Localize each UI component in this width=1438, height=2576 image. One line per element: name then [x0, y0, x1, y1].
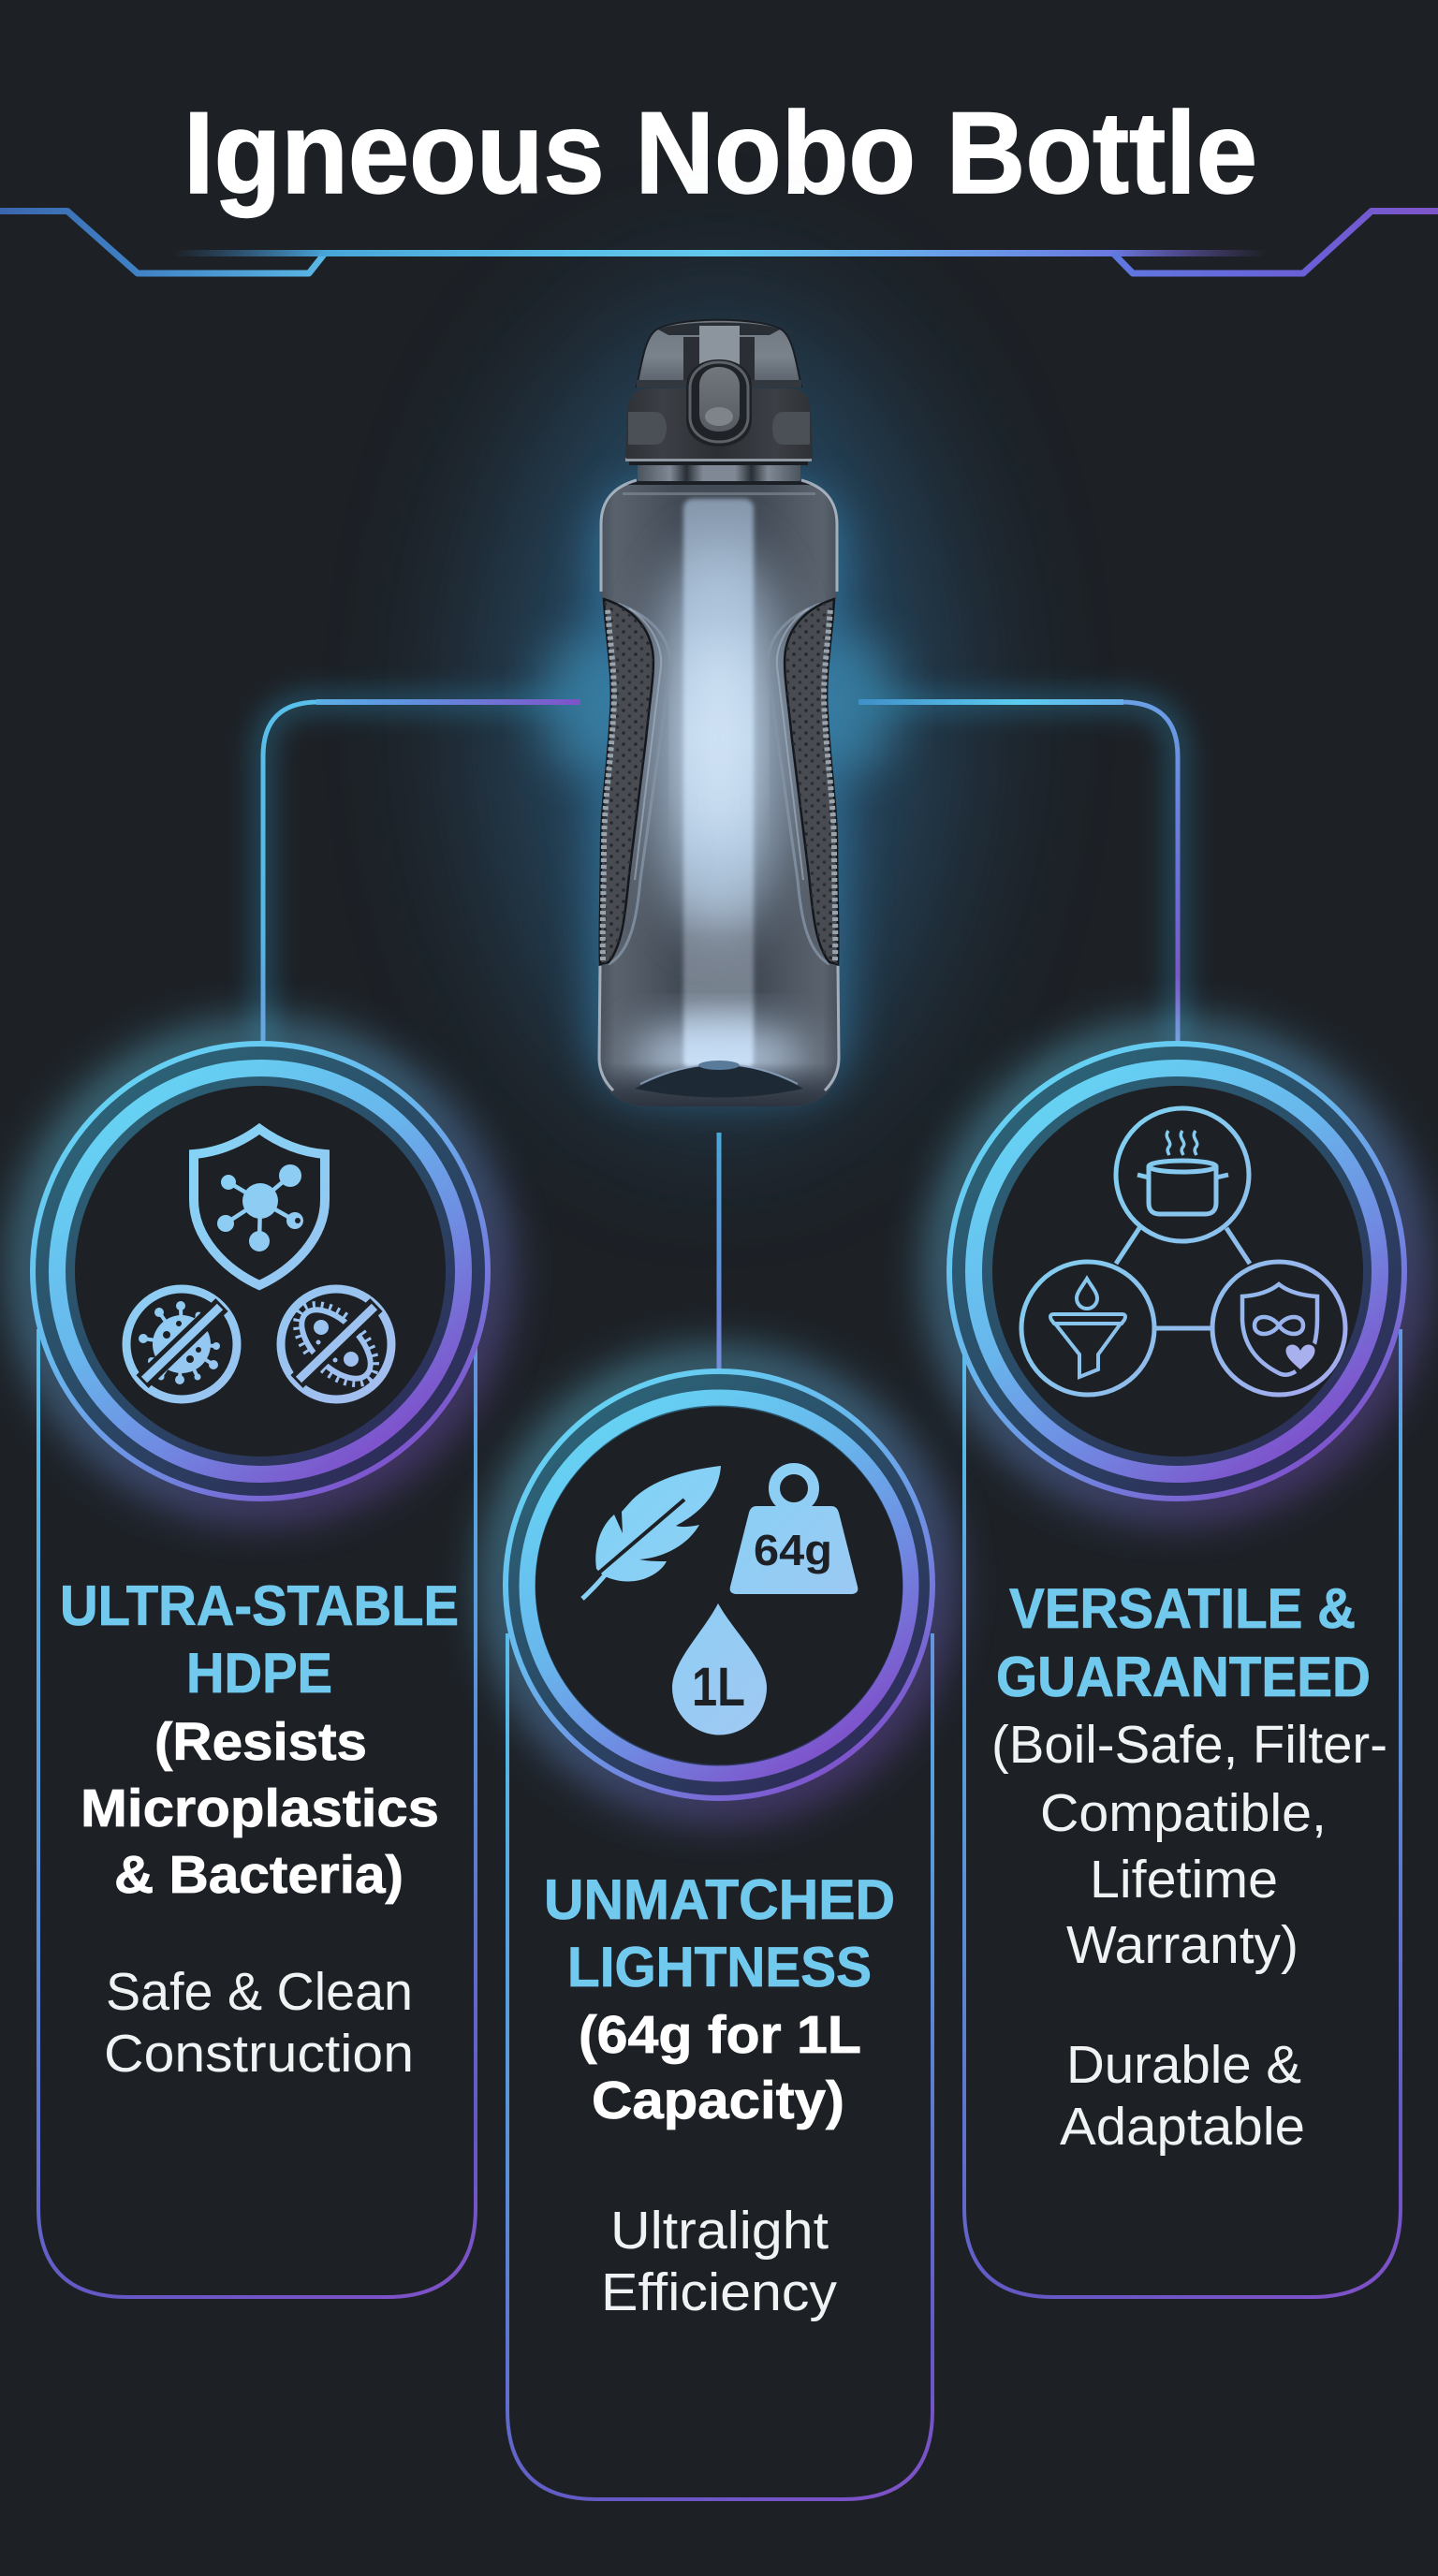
icon: boiling pot	[1116, 1108, 1249, 1241]
bottle body	[595, 473, 843, 1114]
bottle outline rim light	[599, 480, 839, 1090]
caption: ultralight efficiency	[601, 2201, 838, 2322]
icon: filter funnel and drop	[1021, 1262, 1154, 1395]
caption: safe and clean construction: Safe & Clean	[106, 1962, 413, 2022]
icon: no bacteria	[281, 1289, 391, 1399]
bottle neck	[625, 457, 812, 481]
heading: ultra-stable HDPE: ULTRA-STABLE	[60, 1574, 459, 1637]
heading: unmatched lightness: UNMATCHED	[544, 1868, 895, 1931]
icon: lifetime warranty shield	[1212, 1262, 1345, 1395]
right feature circle	[947, 1042, 1406, 1500]
bottle glow	[485, 309, 953, 1114]
heading: versatile and guaranteed	[996, 1577, 1371, 1708]
subheading: 64g for 1L capacity: Capacity)	[592, 2071, 844, 2130]
caption: safe and clean construction: Construction	[104, 2024, 414, 2084]
subheading: 64g for 1L capacity	[579, 2005, 861, 2130]
subheading: resists microplastics and bacteria: & Bacteria)	[114, 1845, 404, 1905]
icon: feather	[582, 1466, 721, 1599]
caption: durable and adaptable	[1060, 2035, 1305, 2157]
icon: 64g weight: 64g	[754, 1526, 832, 1574]
subheading: resists microplastics and bacteria: Microplastics	[81, 1778, 439, 1838]
subheading: resists microplastics and bacteria: (Resists	[154, 1712, 367, 1772]
subheading: resists microplastics and bacteria	[81, 1712, 439, 1905]
icon: network of three roundels	[1021, 1108, 1345, 1395]
subheading: boil-safe, filter-compatible, lifetime warranty: Lifetime	[1090, 1850, 1278, 1910]
text block: left card	[60, 1574, 459, 2084]
text block: centre card	[544, 1868, 895, 2322]
caption: durable and adaptable: Adaptable	[1060, 2097, 1305, 2157]
connector: bottle to left circle	[263, 702, 580, 1044]
panel: right card outline	[964, 1329, 1401, 2297]
caption: ultralight efficiency: Ultralight	[610, 2201, 829, 2261]
subheading: 64g for 1L capacity: (64g for 1L	[579, 2005, 861, 2065]
subheading: boil-safe, filter-compatible, lifetime warranty: Warranty)	[1066, 1915, 1299, 1975]
panel: centre card outline	[507, 1633, 932, 2499]
icon: no virus	[126, 1289, 237, 1399]
caption: durable and adaptable: Durable &	[1066, 2035, 1301, 2095]
connector: bottle to right circle	[858, 702, 1178, 1044]
centre feature circle	[504, 1369, 934, 1800]
bottle grips	[600, 599, 838, 964]
heading: unmatched lightness: LIGHTNESS	[567, 1936, 872, 1998]
heading: ultra-stable HDPE: HDPE	[186, 1642, 332, 1705]
left feature circle	[31, 1042, 490, 1500]
caption: ultralight efficiency: Efficiency	[601, 2262, 838, 2322]
icon: shield with molecule	[194, 1129, 325, 1285]
subheading: boil-safe, filter-compatible, lifetime warranty	[991, 1715, 1387, 1975]
heading: ultra-stable HDPE	[60, 1574, 459, 1705]
text block: right card	[991, 1577, 1387, 2157]
icon: 1L drop: 1L	[692, 1657, 745, 1718]
subheading: boil-safe, filter-compatible, lifetime warranty: (Boil-Safe, Filter-	[991, 1715, 1387, 1775]
icon: 64g weight	[730, 1469, 858, 1594]
header divider lines	[0, 212, 1438, 273]
icon: 1L drop	[672, 1603, 767, 1734]
cap latch	[686, 359, 752, 446]
heading: versatile and guaranteed: GUARANTEED	[996, 1646, 1371, 1708]
subheading: boil-safe, filter-compatible, lifetime warranty: Compatible,	[1040, 1783, 1327, 1843]
connector: bottle to centre circle	[709, 1133, 729, 1372]
heading: versatile and guaranteed: VERSATILE &	[1009, 1577, 1356, 1640]
title: Igneous Nobo Bottle	[183, 89, 1257, 218]
heading: unmatched lightness	[544, 1868, 895, 1998]
bottle cap	[625, 320, 813, 459]
panel: left card outline	[38, 1329, 476, 2297]
bottle	[595, 320, 843, 1114]
caption: safe and clean construction	[104, 1962, 414, 2084]
